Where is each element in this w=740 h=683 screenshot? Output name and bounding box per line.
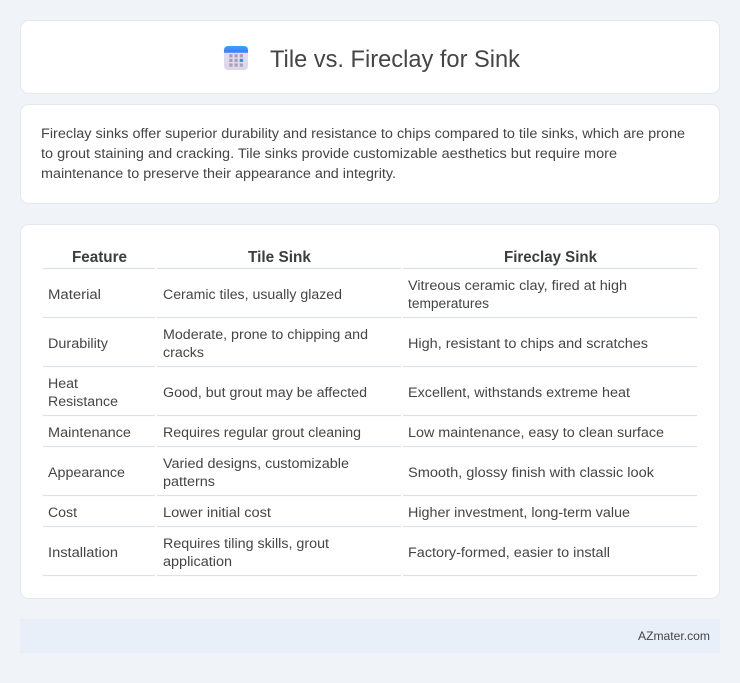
row: maintenance	[48, 425, 664, 441]
intro paragraph: maintenance to preserve their appearance and integrity.	[41, 166, 396, 182]
row: material: Ceramic tiles, usually glazed	[163, 287, 342, 303]
row: installation: application	[163, 554, 232, 570]
row: durability: High, resistant to chips and scratches	[408, 336, 648, 352]
row: material: Material	[48, 287, 101, 303]
table header: Feature	[72, 249, 127, 266]
intro paragraph: Fireclay sinks offer superior durability and resistance to chips compared to tile sinks, which are prone	[41, 126, 685, 142]
row: heat resistance: Resistance	[48, 394, 118, 410]
row: appearance	[48, 456, 655, 490]
row: cost	[48, 505, 630, 521]
table header: Fireclay Sink	[504, 249, 597, 266]
row: cost: Higher investment, long-term value	[408, 505, 630, 521]
panel: comparison table	[20, 224, 720, 598]
row: maintenance: Maintenance	[48, 425, 131, 441]
table header: Tile Sink	[248, 249, 311, 266]
row: installation	[48, 536, 610, 570]
row: appearance: Appearance	[48, 465, 125, 481]
row: cost: Cost	[48, 505, 77, 521]
row: heat resistance	[48, 376, 630, 410]
title: Tile vs. Fireclay for Sink	[270, 46, 521, 73]
row: material	[48, 278, 627, 312]
panel: intro text	[20, 104, 720, 204]
table header	[72, 249, 597, 266]
row: maintenance: Requires regular grout cleaning	[163, 425, 361, 441]
row: heat resistance: Excellent, withstands extreme heat	[408, 385, 630, 401]
row: durability: cracks	[163, 345, 204, 361]
row: material: temperatures	[408, 296, 489, 312]
row: appearance: patterns	[163, 474, 215, 490]
row: durability: Durability	[48, 336, 109, 352]
row: durability	[48, 327, 648, 361]
icon: calendar	[224, 46, 248, 70]
row: heat resistance: Good, but grout may be affected	[163, 385, 367, 401]
intro paragraph: to grout staining and cracking. Tile sinks provide customizable aesthetics but require more	[41, 146, 617, 162]
row: cost: Lower initial cost	[163, 505, 271, 521]
footer	[20, 619, 720, 653]
footer credit: AZmater.com	[638, 629, 710, 643]
row: installation: Requires tiling skills, grout	[163, 536, 329, 552]
row: appearance: Varied designs, customizable	[163, 456, 349, 472]
row: heat resistance: Heat	[48, 376, 78, 392]
row: maintenance: Low maintenance, easy to clean surface	[408, 425, 664, 441]
panel: title card	[20, 20, 720, 94]
row: material: Vitreous ceramic clay, fired at high	[408, 278, 627, 294]
row: durability: Moderate, prone to chipping and	[163, 327, 368, 343]
row: installation: Installation	[48, 545, 118, 561]
row: installation: Factory-formed, easier to install	[408, 545, 610, 561]
row: appearance: Smooth, glossy finish with classic look	[408, 465, 655, 481]
intro paragraph	[41, 126, 685, 182]
